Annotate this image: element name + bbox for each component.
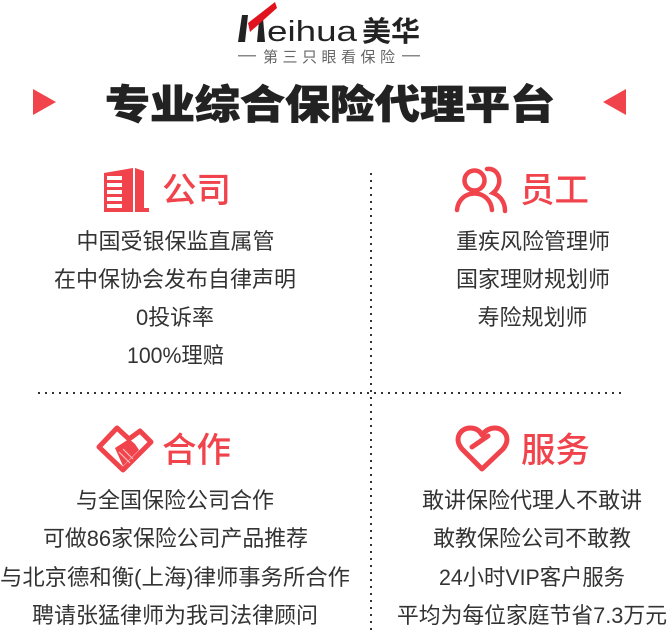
- service list: 平均为每位家庭节省7.3万元: [397, 603, 667, 628]
- company list: [54, 229, 296, 368]
- logo: eihua: [267, 16, 358, 48]
- service list: 敢教保险公司不敢教: [433, 526, 631, 551]
- staff list: 重疾风险管理师: [456, 229, 610, 254]
- service list: 敢讲保险代理人不敢讲: [422, 488, 642, 513]
- icon: building: [104, 168, 149, 212]
- service list: 24小时VIP客户服务: [439, 565, 625, 590]
- staff list: 国家理财规划师: [456, 267, 610, 292]
- left arrow: [33, 89, 56, 115]
- cooperation list: 聘请张猛律师为我司法律顾问: [32, 603, 318, 628]
- staff list: [456, 229, 610, 330]
- panel: company: [54, 168, 296, 368]
- logo: [238, 2, 420, 66]
- cooperation list: 可做86家保险公司产品推荐: [43, 526, 308, 551]
- company list: 100%理赔: [127, 343, 224, 368]
- right arrow: [603, 89, 626, 115]
- service list: [397, 488, 667, 628]
- icon: handshake heart: [99, 428, 151, 470]
- panel: cooperation: [0, 428, 350, 628]
- cooperation list: [0, 488, 350, 628]
- icon: people: [457, 169, 505, 211]
- logo: 美华: [362, 16, 420, 47]
- panel: service: [397, 428, 667, 628]
- company list: 中国受银保监直属管: [76, 229, 275, 254]
- staff list: 寿险规划师: [477, 305, 588, 330]
- panel: staff: [456, 169, 610, 330]
- heading: staff: 员工: [520, 172, 589, 210]
- cooperation list: 与全国保险公司合作: [76, 488, 274, 513]
- heading: company: 公司: [162, 172, 231, 210]
- vertical dotted divider: [370, 173, 372, 630]
- horizontal dotted divider: [38, 392, 622, 394]
- logo: 第三只眼看保险: [263, 48, 395, 66]
- heading: cooperation: 合作: [162, 432, 231, 470]
- icon: heart: [458, 428, 507, 469]
- heading: service: 服务: [521, 432, 590, 470]
- company list: 0投诉率: [136, 305, 214, 330]
- title: 专业综合保险代理平台: [105, 83, 555, 127]
- company list: 在中保协会发布自律声明: [54, 267, 296, 292]
- cooperation list: 与北京德和衡(上海)律师事务所合作: [0, 565, 350, 590]
